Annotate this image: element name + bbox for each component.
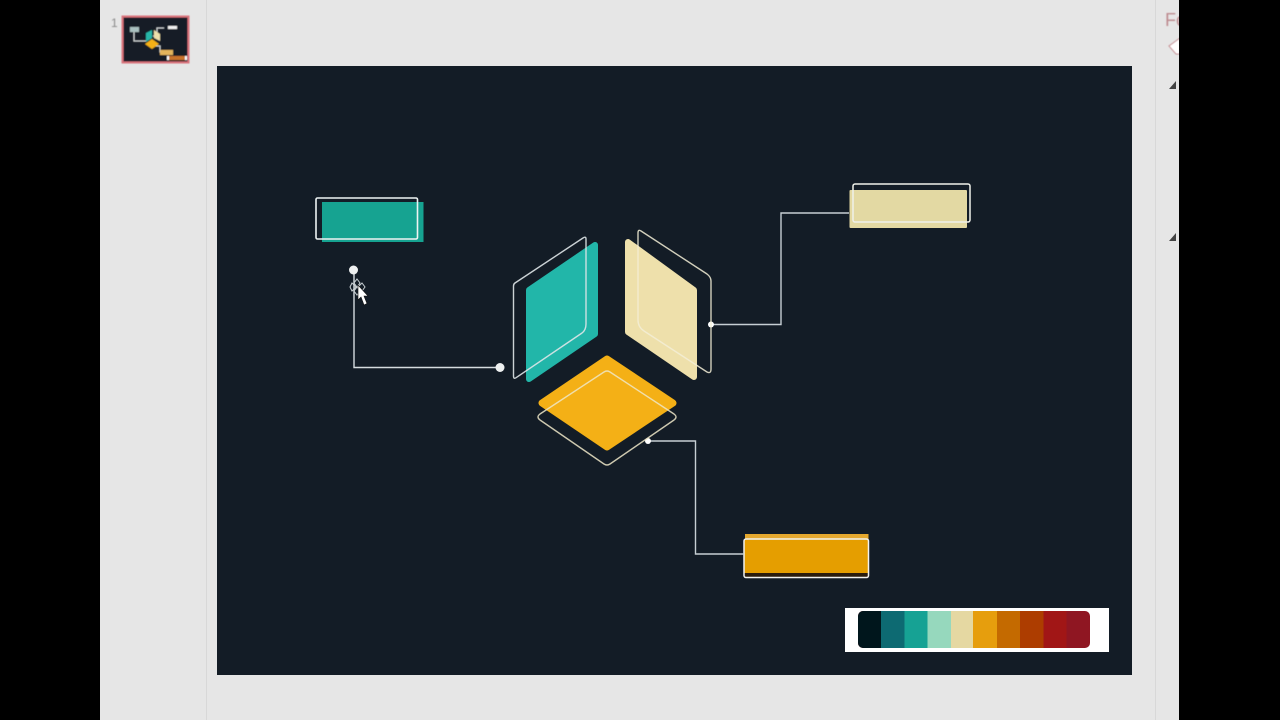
cube outline: gold face — [538, 371, 676, 465]
slide thumbnail panel — [111, 16, 188, 62]
connector: orange box to cube — [648, 441, 744, 554]
cream label box — [850, 184, 970, 228]
slide thumbnail panel: 1 — [111, 16, 118, 30]
cube outline: teal face — [514, 237, 586, 378]
colour palette legend — [845, 608, 1109, 652]
move cursor icon — [350, 279, 368, 305]
orange label box — [744, 534, 868, 578]
slide background — [217, 66, 1132, 675]
cube face: cream — [628, 242, 694, 377]
right black letterbox bar — [1179, 0, 1280, 720]
connector endpoints — [349, 266, 714, 444]
format panel heading, cropped: Fo — [1165, 10, 1186, 30]
cube face: teal — [529, 245, 595, 379]
format panel collapse arrows — [1169, 81, 1176, 241]
cube face: gold — [542, 359, 673, 447]
cube outline: cream face — [638, 230, 711, 373]
connector: cream box to cube — [711, 213, 849, 324]
format panel heading, cropped — [1165, 10, 1186, 54]
teal label box — [316, 198, 424, 242]
connector: teal box to cube — [354, 272, 499, 368]
